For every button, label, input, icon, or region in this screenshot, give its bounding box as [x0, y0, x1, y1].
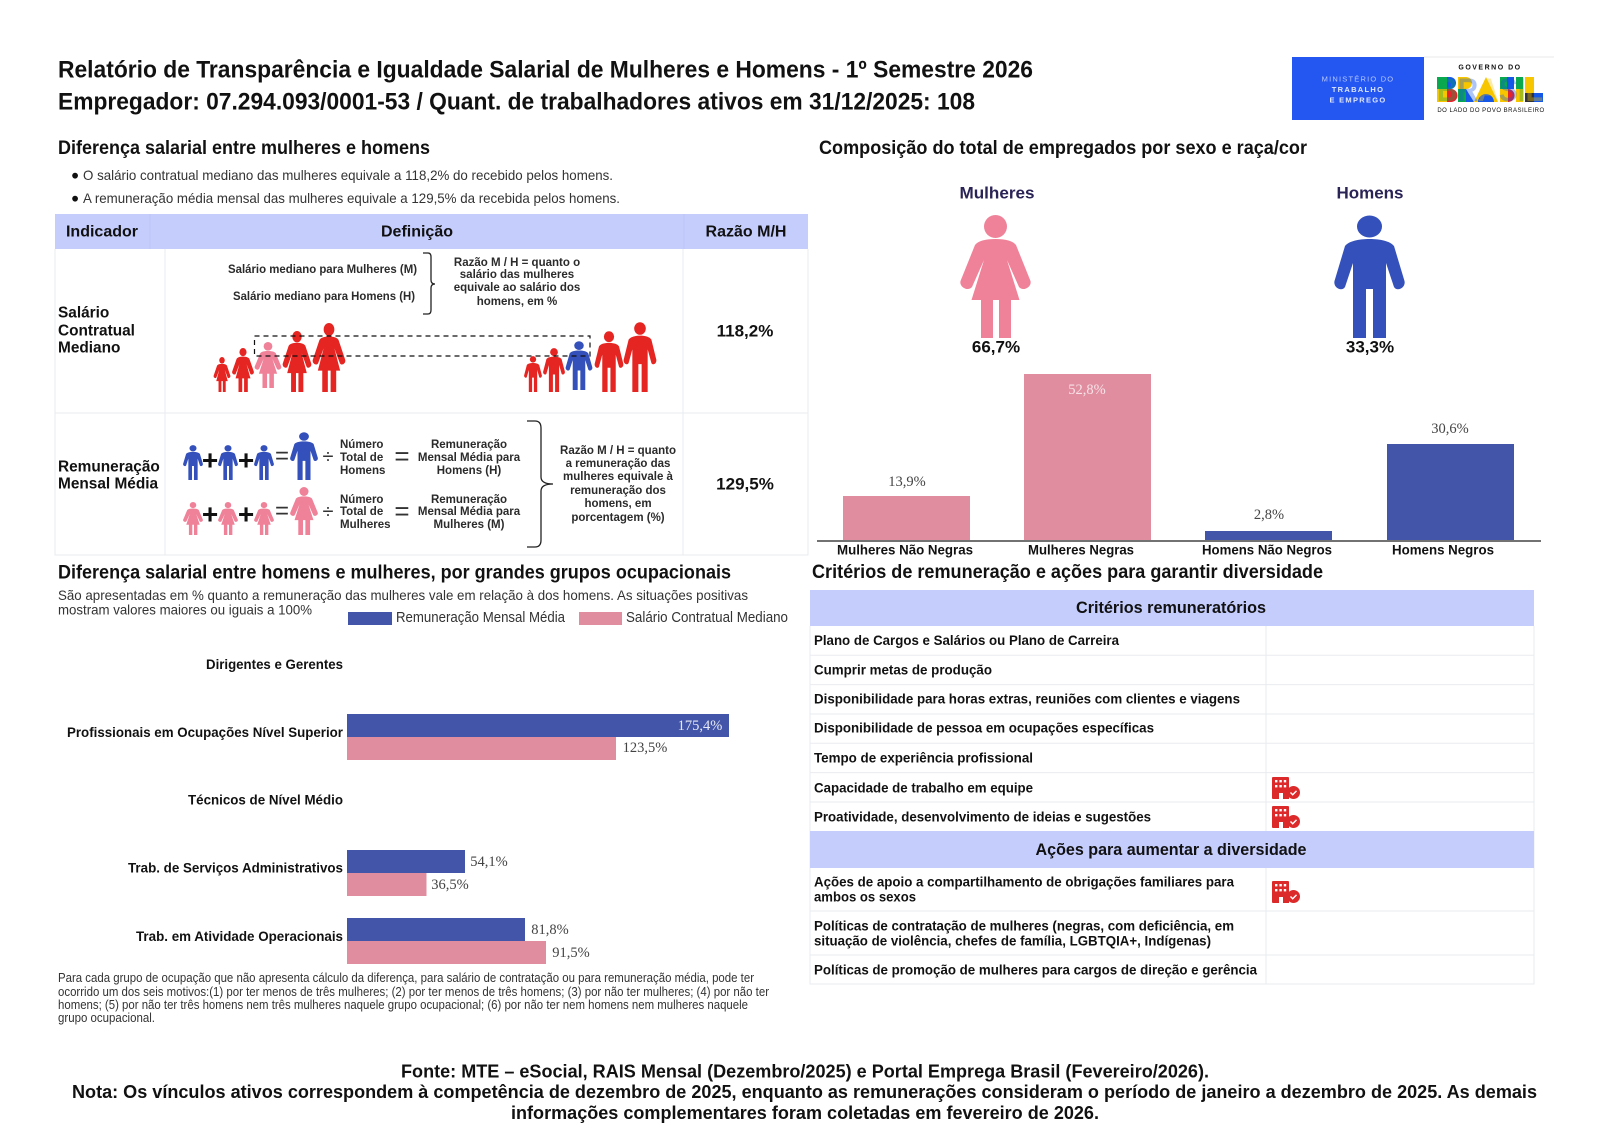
- text: razão remuneração: Razão M / H = quanto: [560, 445, 676, 457]
- heading: composição: Composição do total de empregados por sexo e raça/cor: [819, 137, 1307, 159]
- icon: empresa com check, proatividade: [1272, 806, 1300, 828]
- bar: homens negros: 30,6%: [1431, 421, 1469, 437]
- row label: remuneração mensal média: Remuneração: [58, 458, 160, 476]
- text block: resumo: [71, 167, 620, 206]
- formula: mulheres: =: [394, 496, 410, 526]
- group: atividade operacional: 81,8%: [531, 922, 569, 938]
- formula: homens: +: [202, 444, 218, 476]
- pictogram: homens: [1334, 184, 1405, 356]
- text: razão salário: equivale ao salário dos: [454, 282, 580, 294]
- table header: Indicador: [66, 224, 138, 240]
- action rows: Políticas de contratação de mulheres (negras, com deficiência, em: [814, 918, 1234, 934]
- text block: explicação: São apresentadas em % quanto a remuneração das mulheres vale em relação à dos homens. As situações positivas: [58, 587, 748, 603]
- icon: empresa com check, capacidade: [1272, 777, 1300, 799]
- icons: fila de mulheres com mediana: [214, 323, 345, 392]
- text block: nota de rodapé do gráfico: grupo ocupacional.: [58, 1011, 155, 1025]
- axis labels: Homens Não Negros: [1202, 542, 1332, 558]
- group: serviços administrativos: 36,5%: [431, 877, 469, 893]
- title: [58, 56, 1033, 116]
- group: dirigentes e gerentes: Dirigentes e Gerentes: [206, 657, 343, 672]
- pictogram: homens: Homens: [1336, 184, 1404, 202]
- text block: nota de rodapé do gráfico: Para cada grupo de ocupação que não apresenta cálculo da diferença, para salário de contratação ou para remuneração média, pode ter: [58, 971, 754, 985]
- group: profissionais: 123,5%: [623, 740, 667, 756]
- formula: mulheres: =: [275, 498, 289, 524]
- text block: nota de rodapé do gráfico: homens; (5) por não ter três homens nem três mulheres naquele grupo ocupacional; (6) por não ter nem homens nem mulheres naquele: [58, 998, 748, 1012]
- brace: remuneração: [527, 421, 553, 547]
- heading: grupos ocupacionais: Diferença salarial entre homens e mulheres, por grandes grupos ocupacionais: [58, 562, 731, 584]
- row label: salário contratual mediano: Salário: [58, 304, 109, 322]
- bar: homens não negros: 2,8%: [1254, 507, 1284, 523]
- formula: homens: Número: [340, 439, 383, 451]
- text: razão remuneração: mulheres equivale à: [563, 471, 674, 483]
- footer: fonte e nota: Fonte: MTE – eSocial, RAIS Mensal (Dezembro/2025) e Portal Emprega Brasil (Fevereiro/2026).: [401, 1062, 1209, 1082]
- formula: mulheres: Mensal Média para: [418, 506, 521, 518]
- axis labels: Homens Negros: [1392, 542, 1494, 558]
- text: razão remuneração: a remuneração das: [566, 458, 670, 470]
- action rows: ambos os sexos: [814, 890, 916, 904]
- row label: salário contratual mediano: Mediano: [58, 340, 120, 356]
- group: serviços administrativos: Trab. de Serviços Administrativos: [128, 860, 343, 876]
- criteria rows: Capacidade de trabalho em equipe: [814, 780, 1033, 796]
- formula: mulheres: [183, 487, 521, 535]
- text block: nota de rodapé do gráfico: [58, 971, 769, 1025]
- formula: homens: Total de: [340, 452, 383, 464]
- action rows: [814, 874, 1257, 978]
- logo: Ministério do Trabalho e Emprego / Governo do Brasil: GOVERNO DO: [1458, 64, 1522, 72]
- formula: mulheres: Mulheres: [340, 519, 390, 531]
- text: razão salário: [454, 257, 580, 308]
- text: razão salário: salário das mulheres: [460, 269, 574, 281]
- formula: homens: +: [238, 444, 254, 476]
- bar: mulheres negras: 52,8%: [1068, 382, 1106, 398]
- action rows: Ações de apoio a compartilhamento de obrigações familiares para: [814, 874, 1234, 890]
- logo: Ministério do Trabalho e Emprego / Governo do Brasil: BRASIL: [1437, 72, 1543, 108]
- formula: homens: =: [275, 442, 289, 470]
- table header: Razão M/H: [706, 224, 786, 240]
- bar: mulheres não negras: 13,9%: [888, 474, 926, 490]
- action rows: situação de violência, chefes de família, LGBTQIA+, Indígenas): [814, 934, 1211, 948]
- bar: mulheres não negras: [843, 474, 970, 540]
- legend: [348, 610, 788, 626]
- formula: mulheres: +: [202, 498, 218, 530]
- value: 129,5%: 129,5%: [716, 474, 774, 494]
- heading: critérios: Critérios de remuneração e ações para garantir diversidade: [812, 561, 1323, 583]
- criteria rows: Cumprir metas de produção: [814, 662, 992, 678]
- bar: mulheres negras: [1024, 374, 1151, 540]
- criteria rows: Tempo de experiência profissional: [814, 750, 1033, 766]
- formula: mulheres: Número: [340, 494, 383, 506]
- formula: homens: Homens (H): [437, 465, 501, 477]
- footer: fonte e nota: informações complementares foram coletadas em fevereiro de 2026.: [511, 1103, 1099, 1123]
- band: ações: Ações para aumentar a diversidade: [1036, 841, 1306, 859]
- text: razão salário: homens, em %: [477, 296, 557, 308]
- logo: Ministério do Trabalho e Emprego / Governo do Brasil: TRABALHO: [1332, 85, 1384, 94]
- group: profissionais: [67, 714, 729, 760]
- formula: homens: ÷: [323, 446, 334, 468]
- pictogram: mulheres: Mulheres: [960, 184, 1034, 202]
- value: 118,2%: 118,2%: [717, 322, 773, 340]
- axis labels: Mulheres Não Negras: [837, 542, 973, 558]
- formula: mulheres: Remuneração: [431, 494, 507, 506]
- text block: resumo: ●: [71, 168, 79, 182]
- formula: homens: Remuneração: [431, 439, 507, 451]
- criteria rows: Disponibilidade para horas extras, reuniões com clientes e viagens: [814, 692, 1240, 706]
- text block: nota de rodapé do gráfico: ocorrido um dos seis motivos:(1) por ter menos de três mulheres; (2) por ter menos de três homens; (3) por não ter mulheres; (4) por não ter: [58, 985, 769, 999]
- group: atividade operacional: 91,5%: [552, 945, 590, 961]
- definition text: salário mediano: Salário mediano para Homens (H): [233, 289, 415, 303]
- heading: diferença salarial: Diferença salarial entre mulheres e homens: [58, 137, 430, 159]
- icon: empresa com check, ações: [1272, 881, 1300, 903]
- formula: homens: Homens: [340, 465, 385, 477]
- brace: salário: [423, 253, 435, 314]
- icons: fila de homens com mediana: [524, 322, 656, 392]
- definition text: salário mediano: Salário mediano para Mulheres (M): [228, 262, 417, 276]
- panel: tabela de indicadores: [55, 214, 808, 555]
- footer: fonte e nota: [72, 1062, 1537, 1123]
- group: profissionais: Profissionais em Ocupações Nível Superior: [67, 725, 344, 740]
- group: atividade operacional: [136, 918, 590, 964]
- logo: Ministério do Trabalho e Emprego / Governo do Brasil: MINISTÉRIO DO: [1322, 74, 1394, 84]
- formula: homens: Mensal Média para: [418, 452, 521, 464]
- group: técnicos: Técnicos de Nível Médio: [188, 792, 343, 808]
- band: critérios remuneratórios: Critérios remuneratórios: [1076, 599, 1266, 617]
- footer: fonte e nota: Nota: Os vínculos ativos correspondem à competência de dezembro de 2025, enquanto as remunerações consideram o período de janeiro a dezembro de 2025. As demais: [72, 1082, 1537, 1102]
- text: razão remuneração: [560, 445, 676, 524]
- row label: salário contratual mediano: Contratual: [58, 322, 135, 340]
- axis labels: [837, 542, 1494, 558]
- criteria rows: Proatividade, desenvolvimento de ideias e sugestões: [814, 810, 1151, 824]
- logo: Ministério do Trabalho e Emprego / Governo do Brasil: E EMPREGO: [1329, 96, 1387, 104]
- formula: mulheres: Mulheres (M): [434, 519, 505, 531]
- table header: Definição: [381, 224, 453, 240]
- logo: Ministério do Trabalho e Emprego / Governo do Brasil: DO LADO DO POVO BRASILEIRO: [1437, 108, 1545, 114]
- bar: homens não negros: [1205, 507, 1332, 540]
- criteria rows: Disponibilidade de pessoa em ocupações específicas: [814, 720, 1154, 736]
- text block: resumo: ●: [71, 190, 79, 206]
- text block: explicação: mostram valores maiores ou iguais a 100%: [58, 602, 312, 618]
- formula: homens: =: [394, 441, 410, 471]
- text: razão salário: Razão M / H = quanto o: [454, 257, 580, 269]
- action rows: Políticas de promoção de mulheres para cargos de direção e gerência: [814, 962, 1257, 978]
- legend: Salário Contratual Mediano: [626, 610, 788, 626]
- dashed median link: [254, 336, 590, 356]
- group: profissionais: 175,4%: [678, 718, 722, 734]
- pictogram: homens: 33,3%: [1346, 338, 1394, 356]
- criteria rows: Plano de Cargos e Salários ou Plano de Carreira: [814, 633, 1119, 648]
- text: razão remuneração: porcentagem (%): [571, 512, 665, 524]
- group: serviços administrativos: [128, 850, 508, 896]
- formula: mulheres: ÷: [323, 501, 334, 523]
- definition text: salário mediano: [228, 262, 417, 303]
- text block: resumo: O salário contratual mediano das mulheres equivale a 118,2% do recebido pelos homens.: [83, 167, 613, 183]
- legend: Remuneração Mensal Média: [396, 610, 566, 626]
- bar: homens negros: [1387, 421, 1514, 540]
- formula: mulheres: Total de: [340, 506, 383, 518]
- criteria rows: [814, 633, 1240, 824]
- pictogram: mulheres: [960, 184, 1034, 356]
- band: ações: [810, 831, 1534, 868]
- text: razão remuneração: remuneração dos: [570, 485, 666, 497]
- bar chart: composição por sexo e raça: [817, 374, 1541, 558]
- group: serviços administrativos: 54,1%: [470, 854, 508, 870]
- text block: explicação: [58, 587, 748, 618]
- title: Relatório de Transparência e Igualdade Salarial de Mulheres e Homens - 1º Semestre 2026: [58, 56, 1033, 84]
- axis labels: Mulheres Negras: [1028, 542, 1134, 558]
- text: razão remuneração: homens, em: [584, 498, 652, 510]
- pictogram: mulheres: 66,7%: [972, 338, 1020, 356]
- formula: homens: [183, 432, 521, 480]
- formula: mulheres: +: [238, 498, 254, 530]
- group: atividade operacional: Trab. em Atividade Operacionais: [136, 929, 343, 944]
- text block: resumo: A remuneração média mensal das mulheres equivale a 129,5% da recebida pelos homens.: [83, 190, 620, 206]
- row label: remuneração mensal média: [58, 458, 160, 492]
- table header: [55, 214, 808, 249]
- bar chart: grupos ocupacionais: [67, 657, 729, 964]
- title: Empregador: 07.294.093/0001-53 / Quant. de trabalhadores ativos em 31/12/2025: 108: [58, 88, 975, 116]
- logo: Ministério do Trabalho e Emprego / Governo do Brasil: [1292, 57, 1554, 120]
- panel: tabela de critérios: [810, 590, 1534, 984]
- row label: salário contratual mediano: [58, 304, 135, 356]
- row label: remuneração mensal média: Mensal Média: [58, 476, 159, 492]
- band: critérios remuneratórios: [810, 590, 1534, 626]
